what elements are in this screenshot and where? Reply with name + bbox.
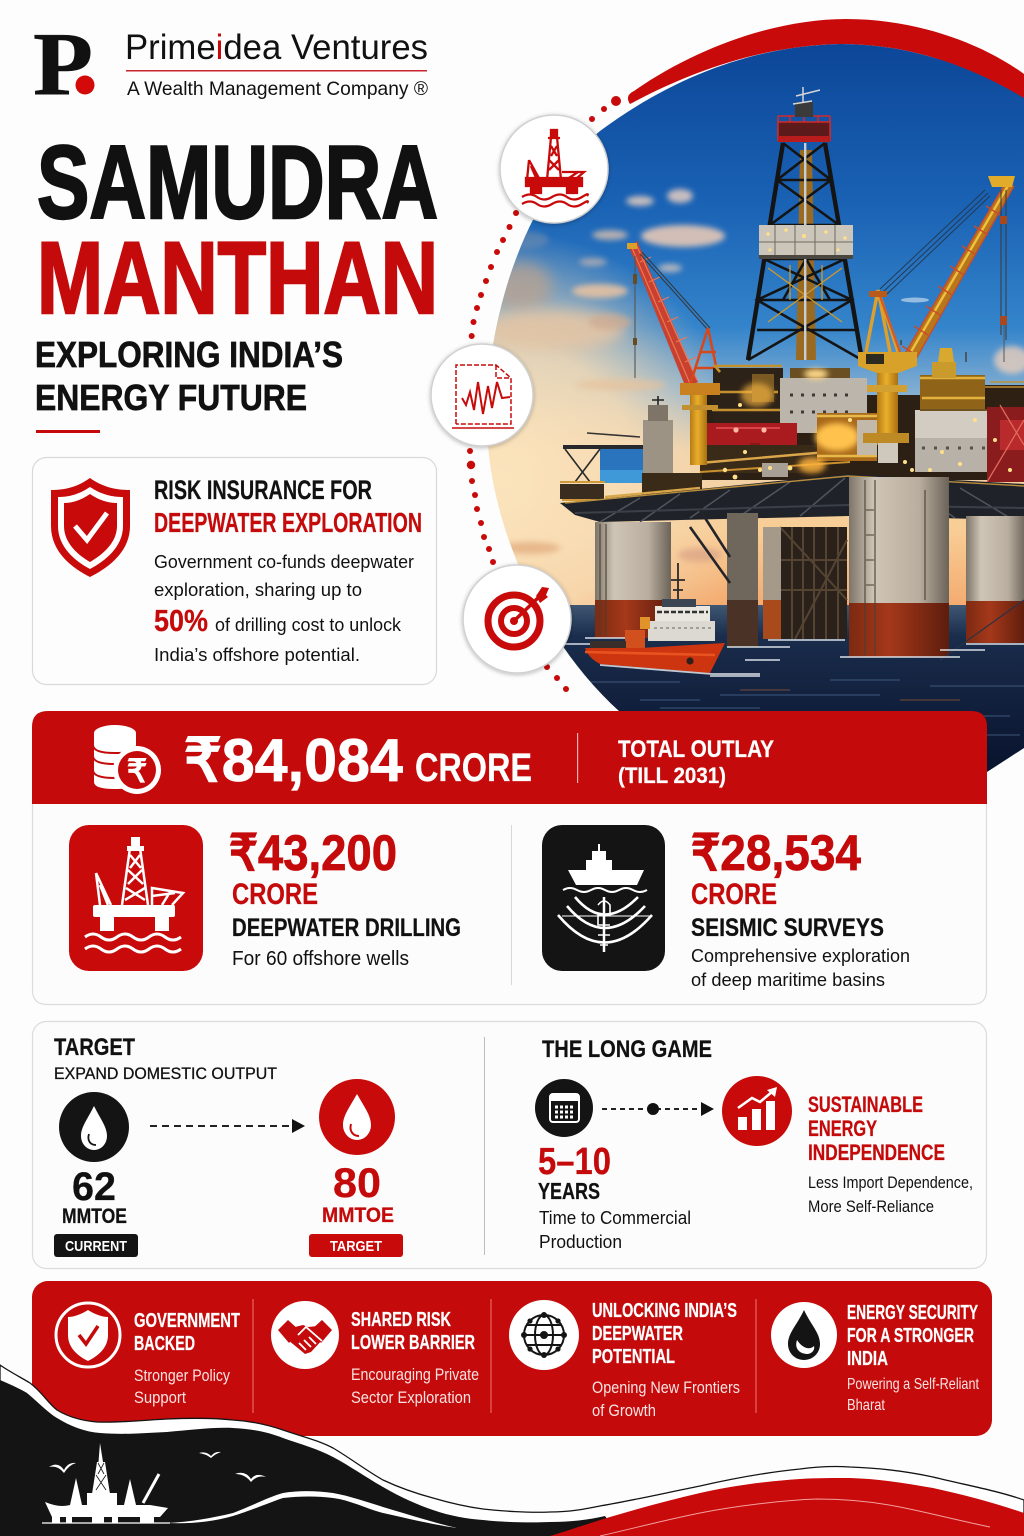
clouds [485, 189, 1024, 562]
benefit: government backed: Stronger Policy [134, 1366, 230, 1385]
sea [564, 605, 1024, 772]
stat: target output: MMTOE [322, 1204, 394, 1227]
subtitle: ENERGY FUTURE [35, 377, 307, 418]
stat: target output: 80 [333, 1159, 381, 1206]
text: sustainable energy independence: ENERGY [808, 1116, 877, 1141]
stat: seismic surveys: ₹28,534 [691, 825, 861, 881]
icon: shield [51, 478, 130, 577]
stat: current output: MMTOE [62, 1205, 127, 1228]
heading: target: TARGET [54, 1034, 135, 1061]
white central block [780, 378, 867, 433]
title [37, 125, 438, 335]
logo: Primeidea Ventures [33, 15, 429, 114]
stat: deepwater drilling [229, 825, 461, 970]
text: sustainable energy independence [808, 1092, 973, 1216]
body text: of drilling cost to unlock [215, 614, 402, 635]
icon: growth chart [722, 1076, 792, 1146]
text: sustainable energy independence: SUSTAINABLE [808, 1092, 923, 1117]
body text [154, 551, 414, 665]
benefit: shared risk: LOWER BARRIER [351, 1332, 475, 1354]
benefit: shared risk: Sector Exploration [351, 1388, 471, 1407]
heading: target [54, 1034, 277, 1083]
panel: total outlay banner: CRORE [415, 746, 532, 790]
red module [703, 423, 797, 445]
stat: target output [309, 1159, 403, 1257]
logo mark: P [33, 15, 93, 114]
body text: exploration, sharing up to [154, 579, 362, 600]
text: sustainable energy independence: Less Import Dependence, [808, 1173, 973, 1192]
benefit: deepwater potential: DEEPWATER [592, 1323, 683, 1345]
stat: seismic surveys: of deep maritime basins [691, 969, 885, 990]
benefit: shared risk: SHARED RISK [351, 1309, 451, 1331]
text: sustainable energy independence: More Self-Reliance [808, 1197, 934, 1216]
body text: 50% [154, 603, 208, 638]
subtitle: EXPLORING INDIA’S [35, 334, 343, 375]
stat: deepwater drilling: For 60 offshore wells [232, 948, 409, 970]
heading: target: EXPAND DOMESTIC OUTPUT [54, 1065, 277, 1083]
stat: seismic surveys: CRORE [691, 878, 777, 911]
birds [49, 1452, 266, 1482]
panel: risk insurance [32, 458, 436, 684]
benefit: deepwater potential: UNLOCKING INDIA’S [592, 1300, 737, 1322]
benefit: energy security: Powering a Self-Reliant [847, 1376, 979, 1393]
stat: current output: 62 [72, 1165, 116, 1209]
left crane [627, 241, 720, 388]
derrick tower [748, 87, 862, 360]
ship [585, 563, 760, 674]
benefit: deepwater potential: POTENTIAL [592, 1346, 675, 1368]
icon: coins: ₹ [127, 753, 147, 789]
company name: Primeidea Ventures [125, 28, 428, 67]
icon: calendar [535, 1079, 593, 1137]
icon circle: seismic chart [431, 344, 533, 446]
benefit: shared risk: Encouraging Private [351, 1365, 479, 1384]
stat: current output [54, 1165, 138, 1257]
arrow: timeline [602, 1102, 714, 1116]
benefit: deepwater potential [509, 1300, 740, 1420]
panel: total outlay banner [32, 711, 987, 804]
dark structure behind derrick base [713, 368, 783, 395]
heading: long game: THE LONG GAME [542, 1036, 712, 1063]
panel: target and long game [32, 1022, 986, 1268]
stat: current output: CURRENT [65, 1238, 127, 1255]
footer waves [0, 1365, 1024, 1536]
subtitle [35, 334, 343, 433]
panel: total outlay banner: (TILL 2031) [618, 763, 726, 788]
benefit: energy security: Bharat [847, 1397, 885, 1414]
benefit: deepwater potential: of Growth [592, 1401, 656, 1420]
stat: years: Time to Commercial [539, 1208, 691, 1228]
benefit: government backed: BACKED [134, 1333, 195, 1355]
lower dark and gold levels [700, 445, 820, 473]
benefit: energy security: INDIA [847, 1348, 888, 1370]
stat: years: YEARS [538, 1178, 600, 1204]
tagline: A Wealth Management Company ® [127, 78, 429, 100]
right modules [920, 375, 985, 409]
right crane [866, 176, 1015, 366]
stat: years [538, 1141, 691, 1252]
stat: deepwater drilling: CRORE [232, 878, 318, 911]
panel: key benefits [32, 1281, 992, 1436]
topside modules [658, 340, 1024, 484]
icon: coins [93, 724, 161, 794]
arrow: current to target [150, 1119, 305, 1133]
benefit: government backed [56, 1303, 240, 1407]
panel: spending breakdown [32, 804, 986, 1004]
benefit: shared risk [271, 1301, 479, 1407]
title: MANTHAN [37, 221, 438, 335]
heading: RISK INSURANCE FOR [154, 475, 372, 505]
title: SAMUDRA [37, 125, 438, 241]
stat: deepwater drilling: ₹43,200 [229, 825, 397, 881]
dotted arc connecting icons [467, 96, 621, 692]
main deck [560, 474, 1024, 522]
benefit: government backed: GOVERNMENT [134, 1310, 240, 1332]
stat: deepwater drilling: DEEPWATER DRILLING [232, 914, 461, 942]
columns [595, 477, 1024, 660]
stat: seismic surveys [691, 825, 910, 990]
red arc above photo [628, 19, 1024, 104]
icon: black oil drop [59, 1092, 129, 1162]
stat: target output: TARGET [330, 1238, 382, 1255]
icon: rig on red tile [69, 825, 203, 971]
icon circle: target [463, 565, 571, 673]
foam and waves [560, 638, 1024, 676]
body text: Government co-funds deepwater [154, 551, 414, 572]
left modules [560, 396, 702, 500]
body text: India’s offshore potential. [154, 644, 360, 665]
panel: risk insurance: DEEPWATER EXPLORATION [154, 507, 422, 538]
total amount: ₹84,084 [184, 727, 404, 794]
text: sustainable energy independence: INDEPENDENCE [808, 1140, 945, 1165]
crane pedestals [690, 393, 707, 465]
stat: seismic surveys: SEISMIC SURVEYS [691, 914, 884, 942]
stat: years: Production [539, 1232, 622, 1252]
stat: seismic surveys: Comprehensive exploration [691, 945, 910, 966]
benefit: deepwater potential: Opening New Frontiers [592, 1378, 740, 1397]
benefit: government backed: Support [134, 1388, 186, 1407]
stat: years: 5–10 [538, 1141, 611, 1183]
footer silhouette: rig and birds [42, 1443, 266, 1523]
outlay label: TOTAL OUTLAY [618, 736, 774, 763]
benefit: energy security: FOR A STRONGER [847, 1325, 974, 1347]
icon: red oil drop [319, 1079, 395, 1155]
icon circle: oil rig [500, 115, 608, 223]
icon: seismic survey ship on black tile [542, 825, 665, 971]
photo: offshore oil rig at sunset [480, 40, 1024, 785]
gold glowing module [817, 413, 877, 461]
benefit: energy security [771, 1302, 979, 1414]
